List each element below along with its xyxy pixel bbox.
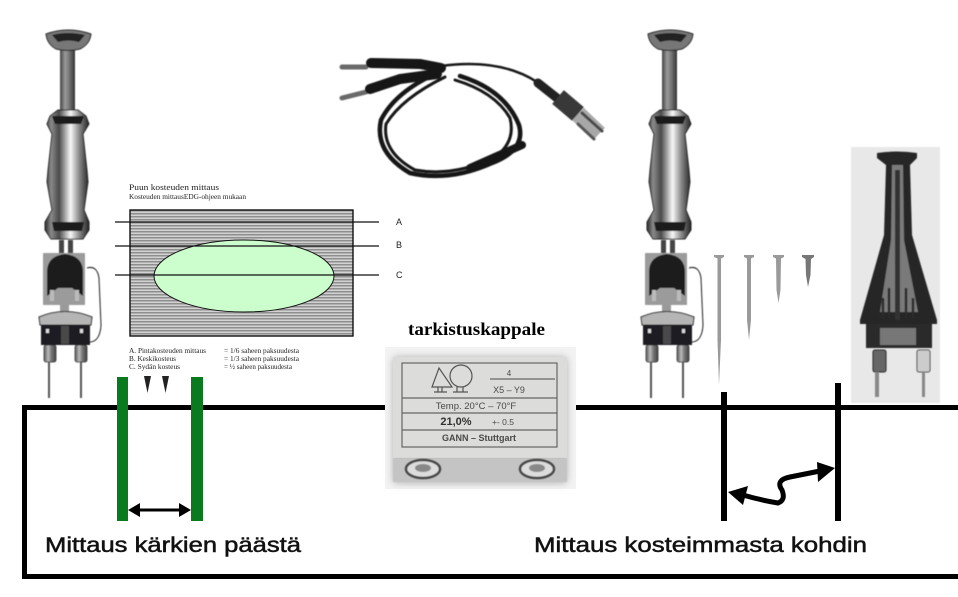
frame outline (22, 405, 958, 579)
plate text: GANN – Stuttgart (442, 433, 516, 443)
double arrow between pin tips (128, 503, 191, 517)
check block (385, 347, 576, 489)
legend: = 1/3 saheen paksuudesta (224, 355, 300, 363)
plug: lower (342, 74, 437, 98)
line labels: C (396, 270, 403, 280)
legend: = ½ saheen paksuudesta (224, 363, 293, 371)
photo: probe head with grey background (851, 147, 940, 403)
diagram title: Puun kosteuden mittaus (129, 182, 219, 192)
caption: right: Mittaus kosteimmasta kohdin (534, 534, 867, 557)
legend: A. Pintakosteuden mittaus (129, 347, 206, 355)
plate text: 21,0% (440, 416, 472, 428)
plate text (436, 369, 525, 443)
legend (129, 347, 300, 371)
timber cross-section (130, 210, 353, 336)
cable with connectors (342, 63, 602, 176)
right probe (641, 30, 703, 398)
legend: B. Keskikosteus (129, 355, 176, 363)
legend: = 1/6 saheen paksuudesta (224, 347, 300, 355)
black measuring bars (721, 383, 841, 521)
green measuring bars (117, 377, 203, 521)
plate text: +- 0.5 (492, 417, 514, 427)
left probe (39, 30, 101, 398)
wood moisture diagram (115, 182, 403, 371)
moist core ellipse (154, 240, 334, 312)
plate text: Temp. 20°C – 70°F (436, 401, 516, 412)
icon: tree symbols (432, 365, 472, 392)
check block title: tarkistuskappale (408, 319, 545, 339)
cable loop (380, 64, 537, 176)
diagram title: Kosteuden mittausEDG-ohjeen mukaan (129, 193, 247, 201)
plug: upper (342, 63, 441, 68)
BNC connector (538, 83, 602, 139)
terminal screws (406, 460, 554, 478)
plate text: X5 – Y9 (493, 385, 525, 395)
measurement lines (115, 222, 379, 275)
line labels: A (396, 217, 402, 227)
pin tips (144, 376, 169, 393)
nails (714, 255, 814, 385)
wavy double arrow (728, 462, 835, 505)
plate text: 4 (507, 369, 512, 378)
caption: left: Mittaus kärkien päästä (45, 534, 301, 557)
label plate (402, 363, 557, 447)
line labels: B (396, 240, 402, 250)
legend: C. Sydän kosteus (129, 363, 180, 371)
diagram title (129, 182, 247, 201)
line labels (396, 217, 403, 280)
